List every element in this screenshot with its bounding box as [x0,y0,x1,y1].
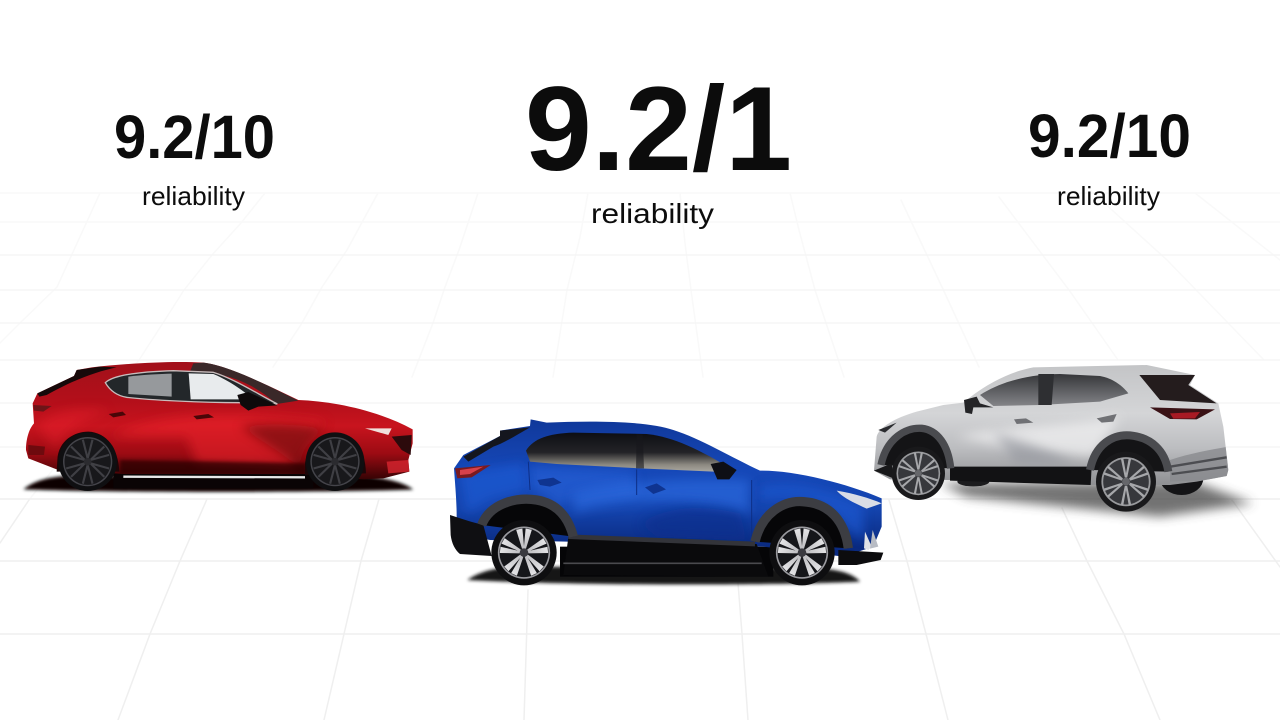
stat: right score [1028,102,1191,211]
far wheels [957,462,1203,495]
car: red hatchback [23,362,413,492]
wheel rear [1096,452,1156,512]
car: silver SUV [874,365,1253,517]
stat: centre score [525,62,792,229]
caption centre: reliability [591,198,714,229]
wheel front [769,520,835,585]
caption left: reliability [142,181,245,211]
car: blue crossover [450,419,883,585]
score value right: 9.2/10 [1028,102,1191,170]
wheel rear [58,432,117,491]
score value centre: 9.2/1 [525,62,792,196]
wheel front [892,447,945,500]
caption right: reliability [1057,181,1160,211]
score value left: 9.2/10 [114,103,275,171]
wheel rear [491,520,557,585]
wheel front [306,432,364,491]
perspective floor grid [0,190,1280,720]
stat: left score [114,103,275,211]
